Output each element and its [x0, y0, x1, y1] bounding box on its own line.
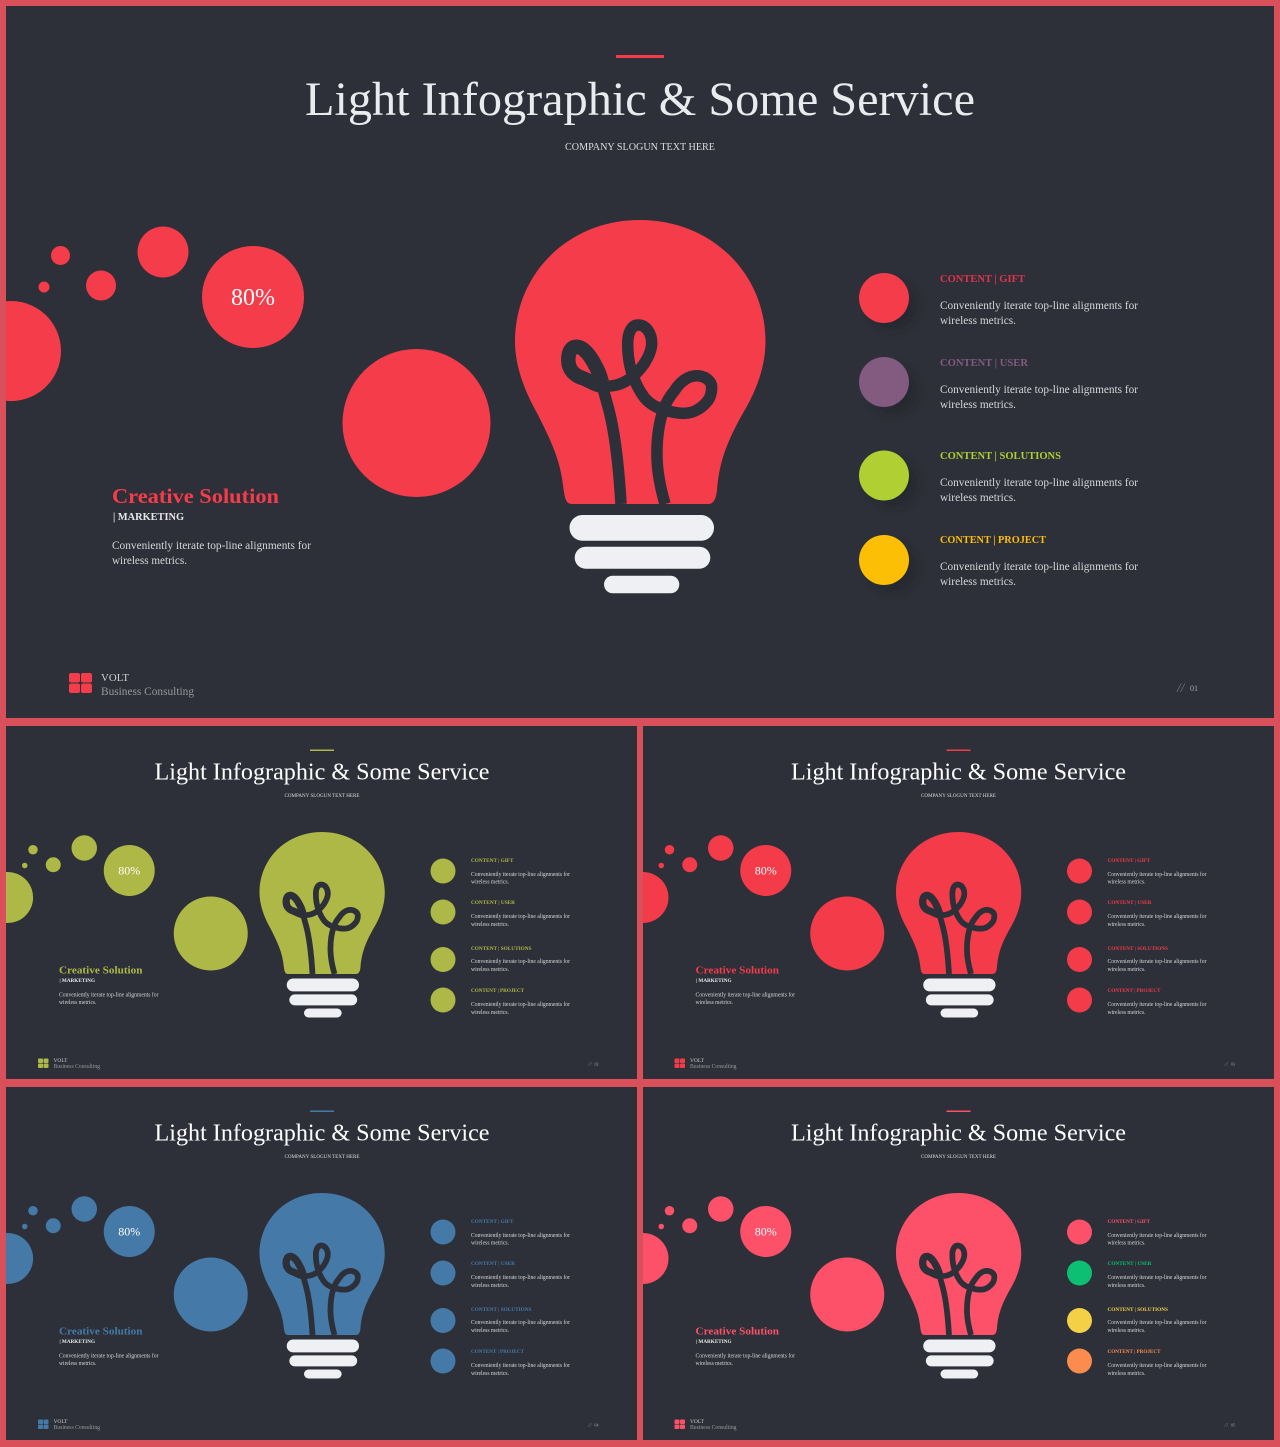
panel: red slide: [643, 726, 1274, 1079]
list item: gift: [1067, 858, 1207, 886]
list item: solutions: CONTENT | SOLUTIONS: [940, 451, 1061, 462]
page number: //: [1224, 1061, 1229, 1068]
text block: creative solution: [696, 1326, 795, 1367]
list item: project: Conveniently iterate top-line alignments for: [1108, 1001, 1207, 1008]
page number: 04: [594, 1422, 598, 1428]
text block: creative solution: wireless metrics.: [59, 1361, 97, 1367]
list item: project: [859, 535, 1138, 592]
footer logo: Business Consulting: [54, 1064, 100, 1070]
list item: gift: wireless metrics.: [1108, 1240, 1146, 1246]
decorative bubbles with 80%: 80%: [118, 1224, 140, 1238]
slogan: COMPANY SLOGUN TEXT HERE: [921, 793, 997, 799]
list item: user: [430, 1260, 570, 1289]
footer logo: [38, 1058, 100, 1070]
footer logo: [674, 1058, 737, 1070]
slogan: COMPANY SLOGUN TEXT HERE: [565, 141, 715, 153]
large circle: [342, 349, 490, 497]
list item: project: [430, 1348, 570, 1377]
icon: light bulb: [896, 832, 1021, 1018]
title: Light Infographic & Some Service: [305, 73, 975, 126]
page number: [587, 1061, 598, 1068]
list item: gift: CONTENT | GIFT: [471, 1219, 514, 1225]
slogan: COMPANY SLOGUN TEXT HERE: [284, 1154, 360, 1160]
accent line: [946, 750, 970, 751]
list item: user: [430, 900, 570, 928]
decorative bubbles with 80%: 80%: [231, 285, 275, 311]
footer logo: VOLT: [690, 1058, 705, 1064]
list item: solutions: [859, 450, 1138, 507]
text block: creative solution: | MARKETING: [60, 1339, 96, 1345]
panel: pink multicolour slide: [643, 1087, 1274, 1440]
list item: solutions: Conveniently iterate top-line alignments for: [1108, 958, 1207, 965]
list item: solutions: wireless metrics.: [471, 1328, 510, 1334]
list item: solutions: CONTENT | SOLUTIONS: [471, 1307, 532, 1313]
list item: solutions: wireless metrics.: [940, 492, 1016, 504]
footer logo: VOLT: [54, 1419, 68, 1425]
text block: creative solution: Conveniently iterate top-line alignments for: [696, 992, 795, 998]
list item: project: wireless metrics.: [1108, 1010, 1146, 1016]
list item: user: wireless metrics.: [940, 399, 1016, 411]
decorative bubbles with 80%: [6, 835, 155, 923]
list item: solutions: [430, 946, 570, 973]
footer logo: [38, 1419, 100, 1431]
list item: project: wireless metrics.: [940, 576, 1016, 588]
text block: creative solution: Creative Solution: [112, 484, 279, 508]
list item: gift: [430, 1219, 570, 1246]
list item: gift: CONTENT | GIFT: [940, 274, 1025, 285]
text block: creative solution: Creative Solution: [696, 1326, 779, 1338]
text block: creative solution: Conveniently iterate top-line alignments for: [59, 992, 159, 998]
list item: project: wireless metrics.: [1108, 1371, 1146, 1377]
text block: creative solution: Creative Solution: [59, 966, 143, 976]
list item: user: [1067, 1260, 1207, 1289]
text block: creative solution: [696, 966, 795, 1006]
list item: solutions: [1067, 1307, 1207, 1334]
text block: creative solution: | MARKETING: [113, 511, 184, 523]
page number: 02: [594, 1062, 598, 1066]
list item: gift: [1067, 1219, 1207, 1246]
list item: user: wireless metrics.: [1108, 1283, 1146, 1289]
page number: 03: [1231, 1062, 1235, 1066]
list item: user: Conveniently iterate top-line alignments for: [471, 913, 570, 920]
accent line: [310, 750, 334, 751]
list item: user: wireless metrics.: [471, 1283, 510, 1289]
icon: light bulb: [260, 1193, 385, 1378]
text block: creative solution: [59, 1326, 159, 1367]
page number: [1176, 680, 1198, 695]
slogan: COMPANY SLOGUN TEXT HERE: [284, 793, 360, 799]
footer logo: Business Consulting: [690, 1425, 737, 1431]
decorative bubbles with 80%: [6, 1196, 155, 1284]
text block: creative solution: wireless metrics.: [59, 1000, 97, 1006]
list item: project: [1067, 1348, 1207, 1377]
page number: [1224, 1061, 1235, 1068]
page number: [587, 1422, 598, 1429]
list item: project: CONTENT | PROJECT: [1108, 1349, 1161, 1355]
text block: creative solution: Conveniently iterate top-line alignments for: [59, 1352, 159, 1360]
list item: project: Conveniently iterate top-line alignments for: [940, 561, 1138, 573]
list item: project: Conveniently iterate top-line alignments for: [471, 1362, 570, 1369]
accent line: [310, 1110, 334, 1112]
page number: [1224, 1422, 1235, 1429]
list item: user: CONTENT | USER: [1108, 900, 1152, 906]
title: Light Infographic & Some Service: [154, 1120, 490, 1146]
large circle: [810, 896, 884, 970]
title: Light Infographic & Some Service: [791, 1120, 1126, 1146]
list item: gift: [430, 858, 570, 886]
page number: //: [587, 1061, 593, 1068]
page number: 01: [1190, 684, 1198, 693]
accent line: [616, 55, 664, 58]
list item: user: Conveniently iterate top-line alignments for: [1108, 1274, 1207, 1281]
decorative bubbles with 80%: [643, 1196, 791, 1284]
decorative bubbles with 80%: [6, 226, 304, 401]
text block: creative solution: Creative Solution: [696, 966, 779, 976]
list item: solutions: wireless metrics.: [1108, 967, 1146, 973]
large circle: [174, 1258, 248, 1332]
panel: green slide: [6, 726, 637, 1079]
list item: solutions: Conveniently iterate top-line alignments for: [471, 1319, 570, 1326]
text block: creative solution: [112, 484, 311, 567]
list item: project: Conveniently iterate top-line alignments for: [1108, 1362, 1207, 1369]
list item: project: CONTENT | PROJECT: [1108, 988, 1161, 994]
list item: user: Conveniently iterate top-line alignments for: [471, 1274, 570, 1281]
list item: gift: wireless metrics.: [471, 1240, 510, 1246]
list item: gift: [859, 273, 1138, 330]
list item: gift: CONTENT | GIFT: [471, 858, 514, 864]
list item: solutions: CONTENT | SOLUTIONS: [1108, 1307, 1168, 1313]
icon: light bulb: [515, 220, 766, 593]
list item: gift: CONTENT | GIFT: [1108, 1219, 1150, 1225]
list item: user: wireless metrics.: [1108, 922, 1146, 928]
list item: solutions: CONTENT | SOLUTIONS: [471, 946, 532, 952]
text block: creative solution: | MARKETING: [696, 1339, 732, 1345]
list item: gift: wireless metrics.: [1108, 880, 1146, 886]
large circle: [810, 1258, 884, 1332]
list item: user: Conveniently iterate top-line alignments for: [1108, 913, 1207, 920]
list item: gift: Conveniently iterate top-line alignments for: [1108, 1232, 1207, 1239]
list item: project: wireless metrics.: [471, 1010, 510, 1016]
panel: blue slide: [6, 1087, 637, 1440]
text block: creative solution: wireless metrics.: [696, 1000, 734, 1006]
decorative bubbles with 80%: [643, 835, 791, 923]
list item: user: wireless metrics.: [471, 922, 510, 928]
list item: solutions: Conveniently iterate top-line alignments for: [471, 958, 570, 965]
text block: creative solution: [59, 966, 159, 1006]
list item: project: CONTENT | PROJECT: [471, 1349, 524, 1355]
list item: user: [859, 357, 1138, 414]
list item: solutions: [430, 1307, 570, 1334]
accent line: [946, 1110, 970, 1112]
list item: gift: wireless metrics.: [471, 880, 510, 886]
decorative bubbles with 80%: 80%: [755, 864, 777, 878]
list item: user: Conveniently iterate top-line alignments for: [940, 384, 1138, 396]
list item: gift: wireless metrics.: [940, 315, 1016, 327]
large circle: [174, 896, 248, 970]
footer logo: VOLT: [101, 672, 129, 684]
footer logo: Business Consulting: [54, 1425, 100, 1431]
footer logo: [674, 1419, 737, 1431]
text block: creative solution: | MARKETING: [60, 978, 96, 984]
list item: user: CONTENT | USER: [471, 900, 515, 906]
list item: project: CONTENT | PROJECT: [471, 988, 524, 994]
text block: creative solution: wireless metrics.: [696, 1361, 734, 1367]
list item: user: CONTENT | USER: [471, 1261, 515, 1267]
list item: gift: Conveniently iterate top-line alignments for: [940, 300, 1138, 312]
page number: //: [1224, 1422, 1229, 1429]
list item: gift: Conveniently iterate top-line alignments for: [471, 871, 570, 878]
list item: project: wireless metrics.: [471, 1371, 510, 1377]
list item: project: [1067, 988, 1207, 1016]
text block: creative solution: Creative Solution: [59, 1326, 143, 1338]
list item: solutions: wireless metrics.: [471, 967, 510, 973]
icon: light bulb: [260, 832, 385, 1018]
list item: project: Conveniently iterate top-line alignments for: [471, 1001, 570, 1008]
text block: creative solution: wireless metrics.: [112, 555, 187, 567]
decorative bubbles with 80%: 80%: [118, 864, 140, 878]
list item: user: [1067, 900, 1207, 928]
title: Light Infographic & Some Service: [791, 760, 1126, 786]
footer logo: Business Consulting: [690, 1064, 737, 1070]
icon: light bulb: [896, 1193, 1021, 1378]
page number: 05: [1231, 1422, 1235, 1428]
text block: creative solution: Conveniently iterate top-line alignments for: [696, 1352, 795, 1360]
list item: user: CONTENT | USER: [940, 358, 1028, 369]
title: Light Infographic & Some Service: [154, 760, 490, 786]
list item: gift: Conveniently iterate top-line alignments for: [471, 1232, 570, 1239]
slogan: COMPANY SLOGUN TEXT HERE: [921, 1154, 997, 1160]
text block: creative solution: Conveniently iterate top-line alignments for: [112, 540, 311, 552]
list item: solutions: Conveniently iterate top-line alignments for: [1108, 1319, 1207, 1326]
footer logo: Business Consulting: [101, 686, 194, 698]
panel: main slide (red): [6, 6, 1274, 718]
footer logo: VOLT: [54, 1058, 68, 1064]
list item: solutions: [1067, 946, 1207, 973]
list item: project: [430, 988, 570, 1016]
list item: solutions: Conveniently iterate top-line alignments for: [940, 477, 1138, 489]
page number: //: [587, 1422, 593, 1429]
decorative bubbles with 80%: 80%: [755, 1224, 777, 1238]
list item: gift: Conveniently iterate top-line alignments for: [1108, 871, 1207, 878]
page number: //: [1176, 680, 1186, 695]
list item: project: CONTENT | PROJECT: [940, 535, 1046, 546]
list item: user: CONTENT | USER: [1108, 1261, 1152, 1267]
list item: gift: CONTENT | GIFT: [1108, 858, 1150, 864]
list item: solutions: CONTENT | SOLUTIONS: [1108, 946, 1168, 952]
footer logo: VOLT: [690, 1419, 705, 1425]
text block: creative solution: | MARKETING: [696, 978, 732, 984]
footer logo: [69, 672, 194, 698]
list item: solutions: wireless metrics.: [1108, 1328, 1146, 1334]
